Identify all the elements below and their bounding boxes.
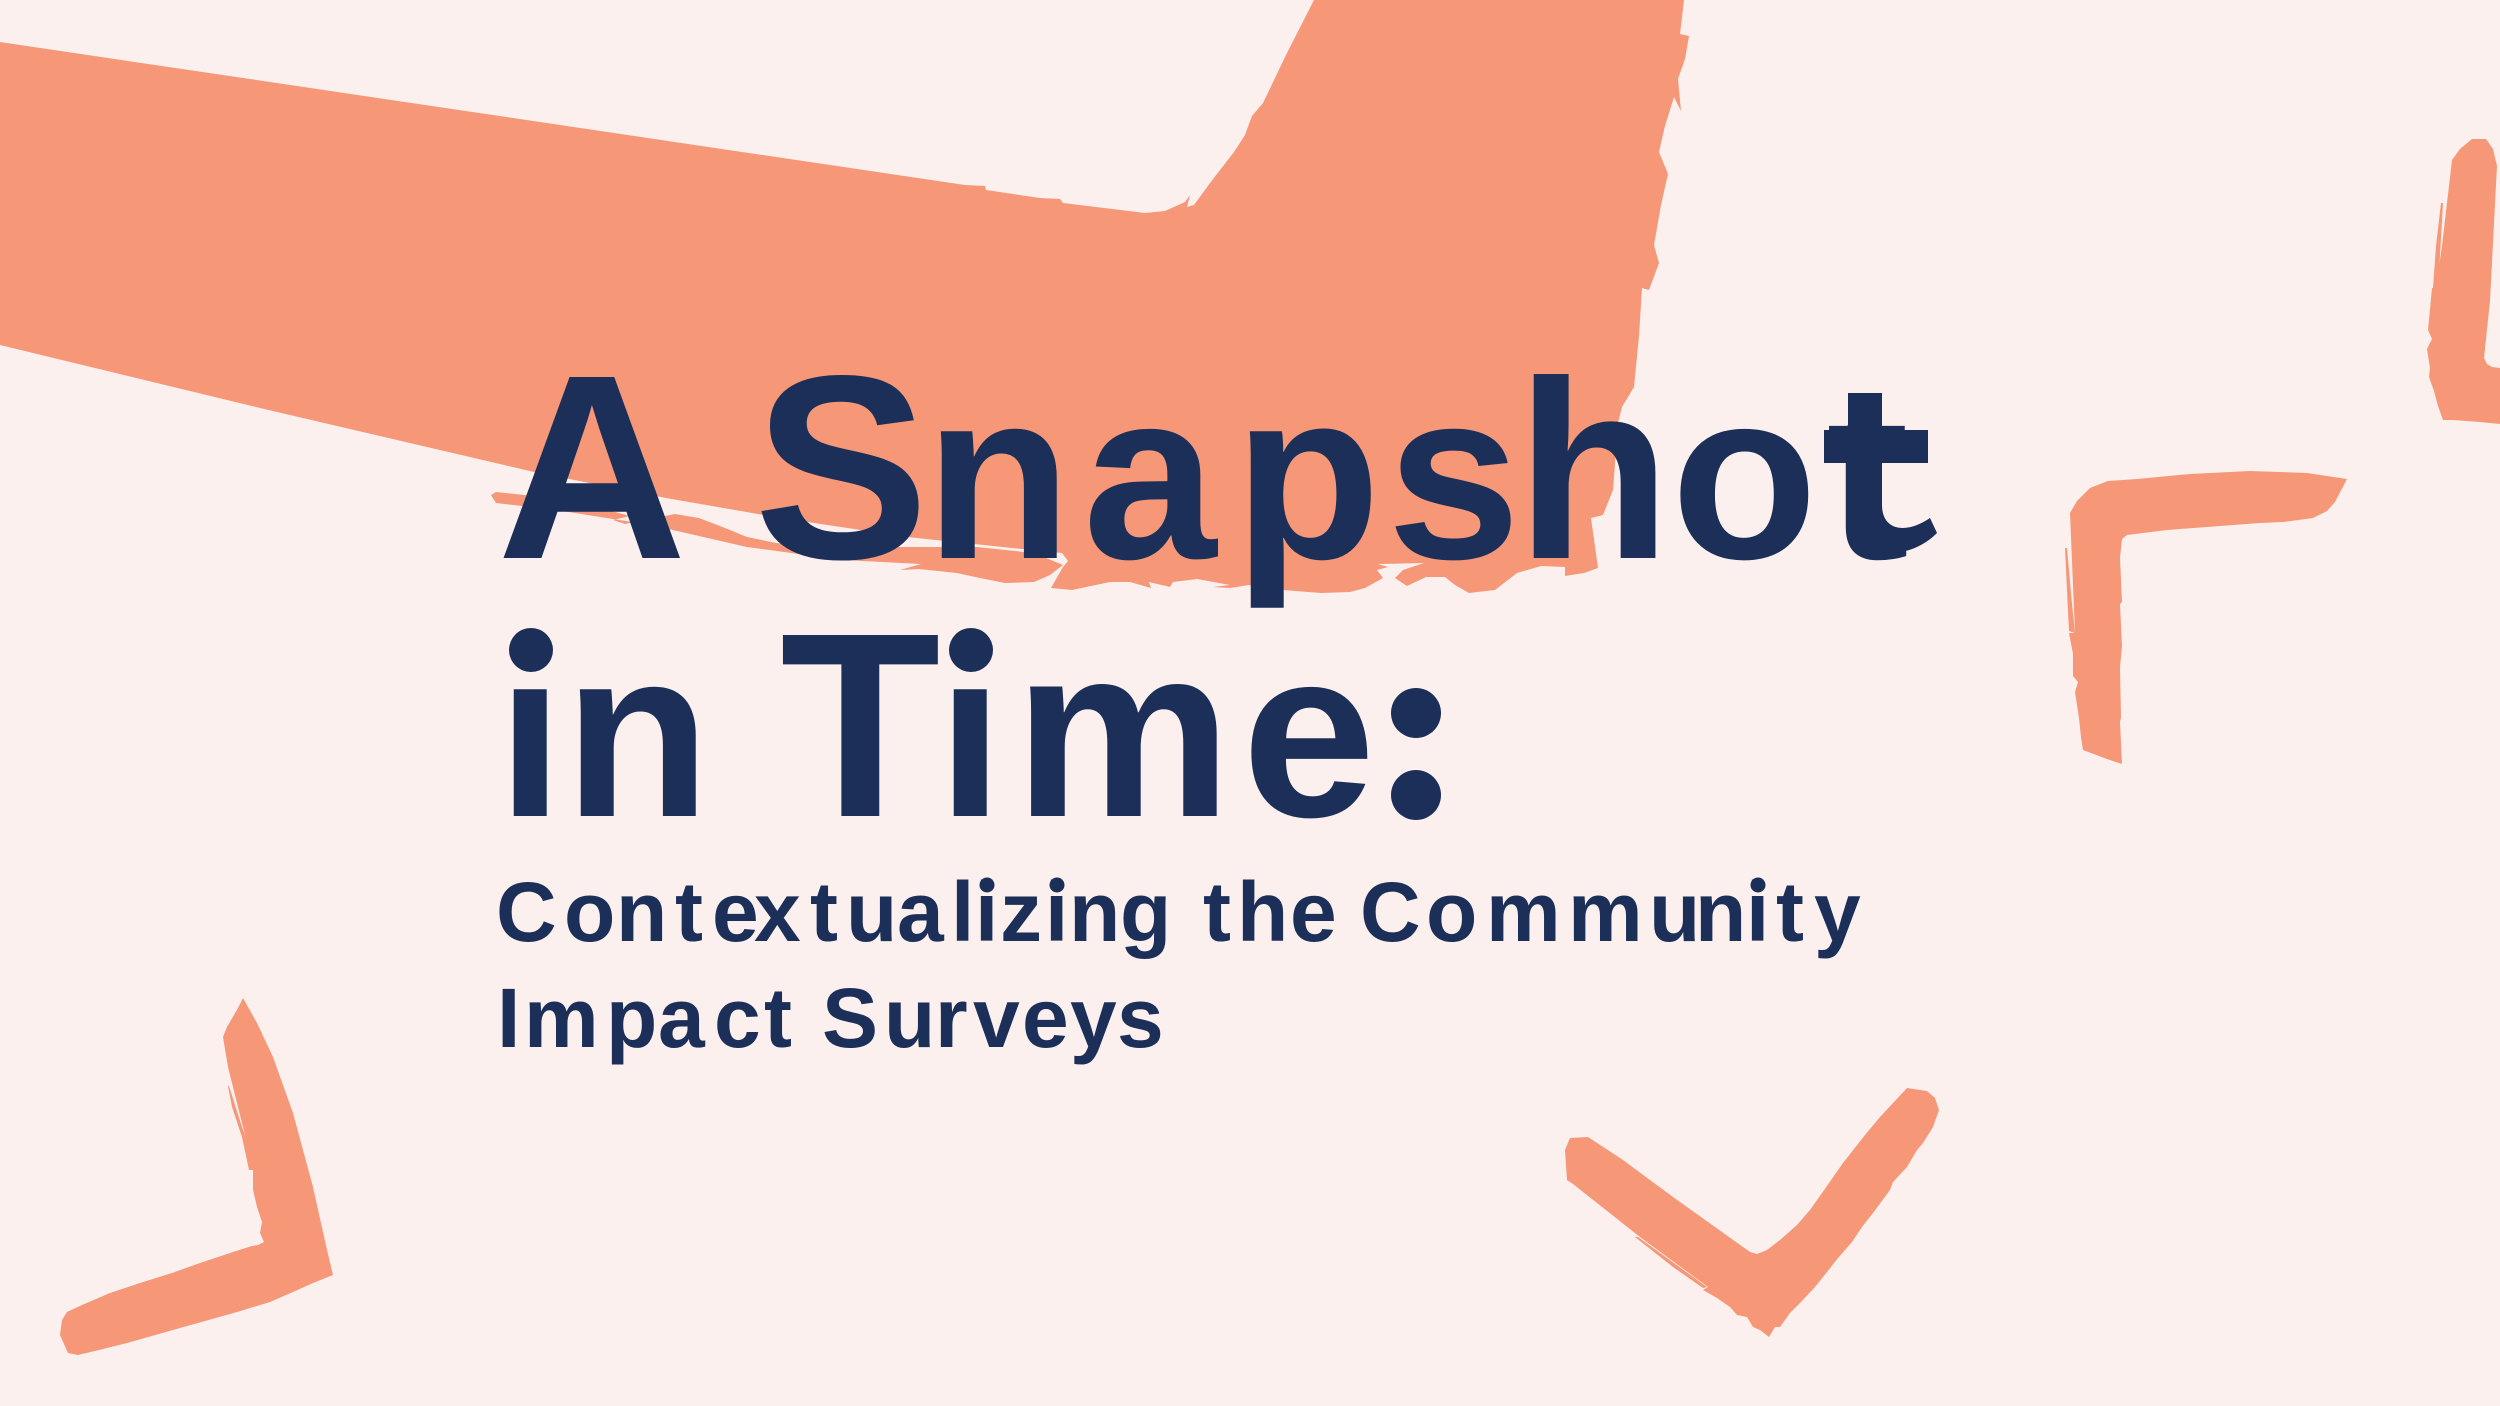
- brush stroke: bottom left corner: [60, 998, 333, 1355]
- title: in: [497, 599, 787, 867]
- brush stroke: bottom check mark: [1565, 1088, 1939, 1337]
- subtitle: Contextualizing the Community: [496, 865, 1861, 959]
- title: i: [937, 599, 1004, 867]
- title: naps: [925, 341, 1520, 609]
- title: e: [1242, 599, 1375, 867]
- title: t: [1826, 332, 1909, 611]
- subtitle: [496, 865, 1861, 1065]
- title: :: [1385, 624, 1452, 849]
- title: T: [780, 578, 941, 872]
- title: h: [1516, 328, 1671, 612]
- title: A: [497, 320, 687, 614]
- title: [497, 320, 1937, 872]
- brush stroke: top right corner: [2427, 139, 2500, 424]
- subtitle: Impact Surveys: [497, 971, 1164, 1065]
- title: o: [1671, 341, 1818, 609]
- title: S: [754, 321, 929, 614]
- brush stroke: right L corner: [2065, 471, 2347, 764]
- brush stroke: large top chevron behind title: [0, 0, 1689, 593]
- title: m: [1014, 594, 1232, 868]
